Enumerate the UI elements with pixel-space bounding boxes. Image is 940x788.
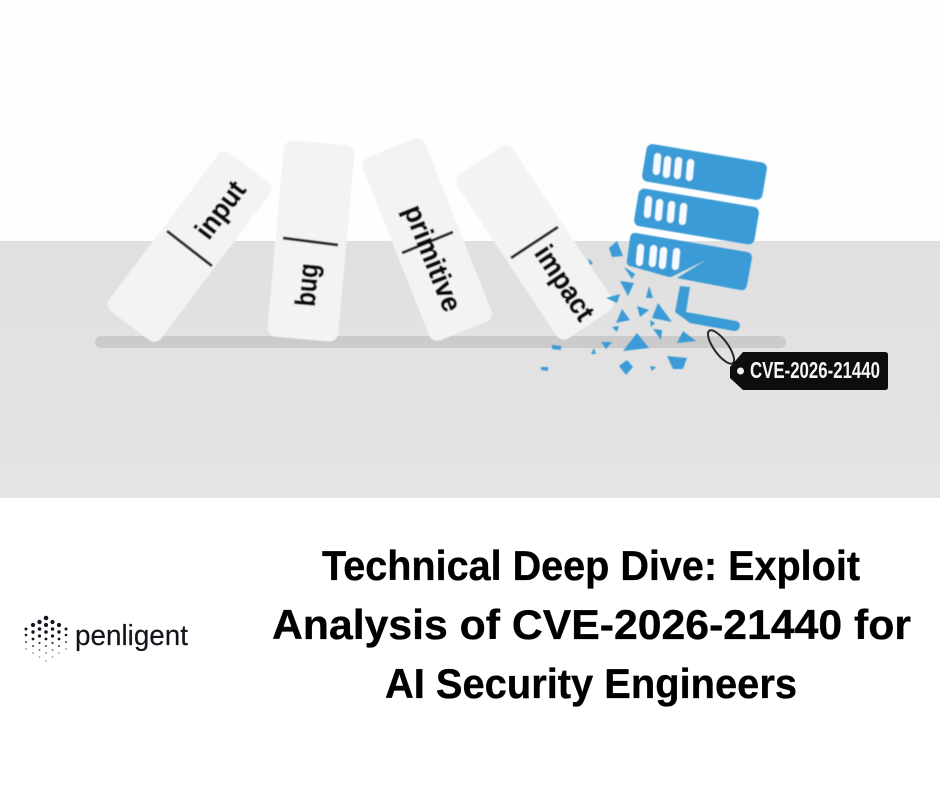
server unit: top [641, 143, 768, 201]
domino: input [104, 148, 275, 345]
icon: tilted server stack [627, 143, 768, 331]
domino: primitive: primitive [398, 200, 468, 316]
logo wordmark: penligent [75, 620, 188, 652]
logo: penligent [24, 616, 188, 662]
title: Analysis of CVE-2026-21440 for [272, 601, 911, 648]
server unit: bottom, cracked [627, 233, 752, 290]
debris shards [541, 241, 696, 375]
title: AI Security Engineers [385, 660, 797, 707]
tag body [730, 352, 888, 390]
logo mark: dot hexagon [24, 616, 68, 662]
domino: impact [452, 142, 617, 343]
title [272, 542, 911, 707]
server unit: middle [633, 188, 760, 245]
server stand [675, 286, 740, 331]
illustration background [0, 0, 940, 498]
tag: CVE-2026-21440 [704, 327, 888, 390]
tag text: CVE-2026-21440 [750, 357, 880, 383]
domino: bug [267, 140, 355, 342]
tag hole [737, 368, 744, 374]
title: Technical Deep Dive: Exploit [322, 542, 860, 589]
domino: primitive [360, 136, 495, 343]
tag string loop [704, 327, 738, 367]
shelf line [95, 336, 786, 348]
domino: impact: impact [529, 239, 601, 326]
domino: input: input [189, 175, 252, 245]
domino: bug: bug [290, 262, 324, 308]
